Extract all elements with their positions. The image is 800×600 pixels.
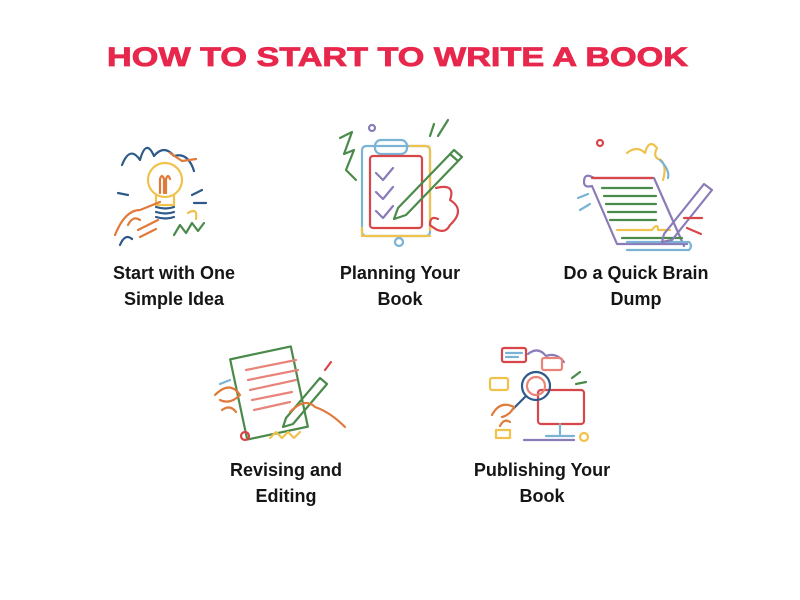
label: revising and editing: Editing xyxy=(256,486,316,506)
icon: light bulb xyxy=(114,146,208,246)
label: planning your book xyxy=(340,263,460,309)
label: brain dump: Dump xyxy=(610,289,662,309)
icon: clipboard xyxy=(338,118,464,248)
label: publishing your book xyxy=(474,460,610,506)
label: planning your book: Planning Your xyxy=(340,263,460,283)
label: brain dump xyxy=(563,263,709,309)
label: start with one simple idea: Simple Idea xyxy=(124,289,224,309)
label: start with one simple idea xyxy=(113,263,235,309)
label: planning your book: Book xyxy=(378,289,422,309)
label: brain dump: Do a Quick Brain xyxy=(563,263,709,283)
label: publishing your book: Book xyxy=(520,486,564,506)
label: revising and editing xyxy=(230,460,342,506)
label: publishing your book: Publishing Your xyxy=(474,460,610,480)
label: revising and editing: Revising and xyxy=(230,460,342,480)
label: start with one simple idea: Start with One xyxy=(113,263,235,283)
icon: scroll and pen xyxy=(576,138,714,252)
icon: publishing xyxy=(488,346,590,442)
title: HOW TO START TO WRITE A BOOK xyxy=(107,42,689,72)
icon: revising paper xyxy=(214,345,346,442)
